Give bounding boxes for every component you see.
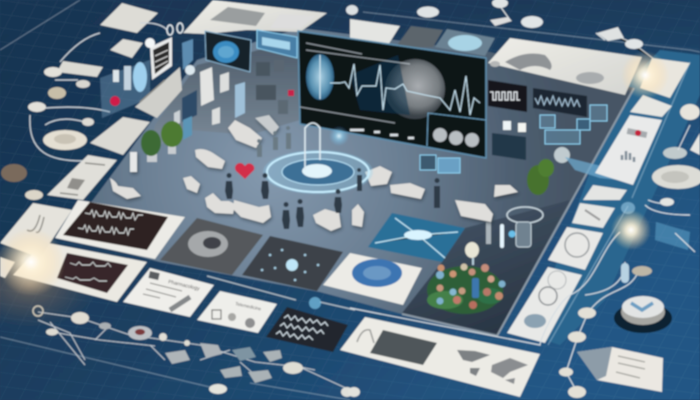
moon [385, 59, 445, 119]
central fountain hologram [263, 123, 373, 194]
left floating panels [30, 3, 167, 161]
light-burst screen [368, 213, 465, 262]
telemedicine panel [197, 291, 277, 333]
dark slab under flowers [402, 200, 570, 334]
right glare [621, 51, 669, 99]
text panel: Pharmacology [168, 279, 201, 292]
virus panel [323, 253, 422, 305]
glass screens on left [100, 23, 195, 118]
right paper column [507, 58, 690, 343]
floor connector with mic icon [207, 276, 355, 310]
eye image tile [160, 218, 263, 275]
ecg panel lower [13, 242, 147, 302]
brain scan monitor [205, 31, 251, 72]
holographic tiles [420, 105, 607, 173]
large right paper panel [488, 38, 642, 95]
stethoscope chest piece [614, 296, 672, 333]
lower-right glare [611, 210, 651, 250]
large top paper panel [183, 0, 327, 34]
particle image tile [242, 236, 343, 291]
control bar [350, 130, 414, 138]
left column paper panels [47, 67, 182, 200]
side ecg displays [488, 80, 587, 117]
brain scan [306, 54, 334, 100]
gauges [433, 128, 479, 147]
dark waveform panel [266, 307, 348, 352]
lab equipment [486, 207, 543, 248]
platform floor [60, 28, 634, 336]
text panel [123, 268, 214, 317]
heart icon [235, 163, 254, 179]
moon shadow [350, 55, 410, 115]
bottom connector network [33, 306, 353, 397]
blue right band [530, 50, 700, 345]
edge strip [548, 62, 690, 345]
glass scan plate [565, 157, 625, 180]
people [225, 126, 440, 229]
top connector nodes [346, 0, 643, 49]
medical pod furniture [110, 115, 518, 231]
platform edge [402, 88, 634, 336]
plants [141, 121, 554, 195]
back thumbnails [350, 19, 495, 56]
right upper glass plate [621, 198, 695, 252]
ecg trace [330, 64, 480, 115]
right disks [610, 33, 700, 189]
bottom map panel [340, 317, 540, 397]
main monitor [298, 31, 486, 158]
small top monitor [257, 30, 297, 58]
bottom right document card [577, 347, 663, 392]
ecg panel upper [55, 200, 185, 259]
left disks [1, 67, 94, 200]
flower arrangement [427, 242, 506, 314]
glowing squares [492, 121, 570, 163]
right tube connector and nodes [348, 232, 652, 398]
telemedicine panel: Telemedicine [235, 301, 262, 312]
small left panels [0, 203, 72, 278]
back wall with framed pictures [150, 40, 300, 150]
left glare [0, 228, 65, 296]
